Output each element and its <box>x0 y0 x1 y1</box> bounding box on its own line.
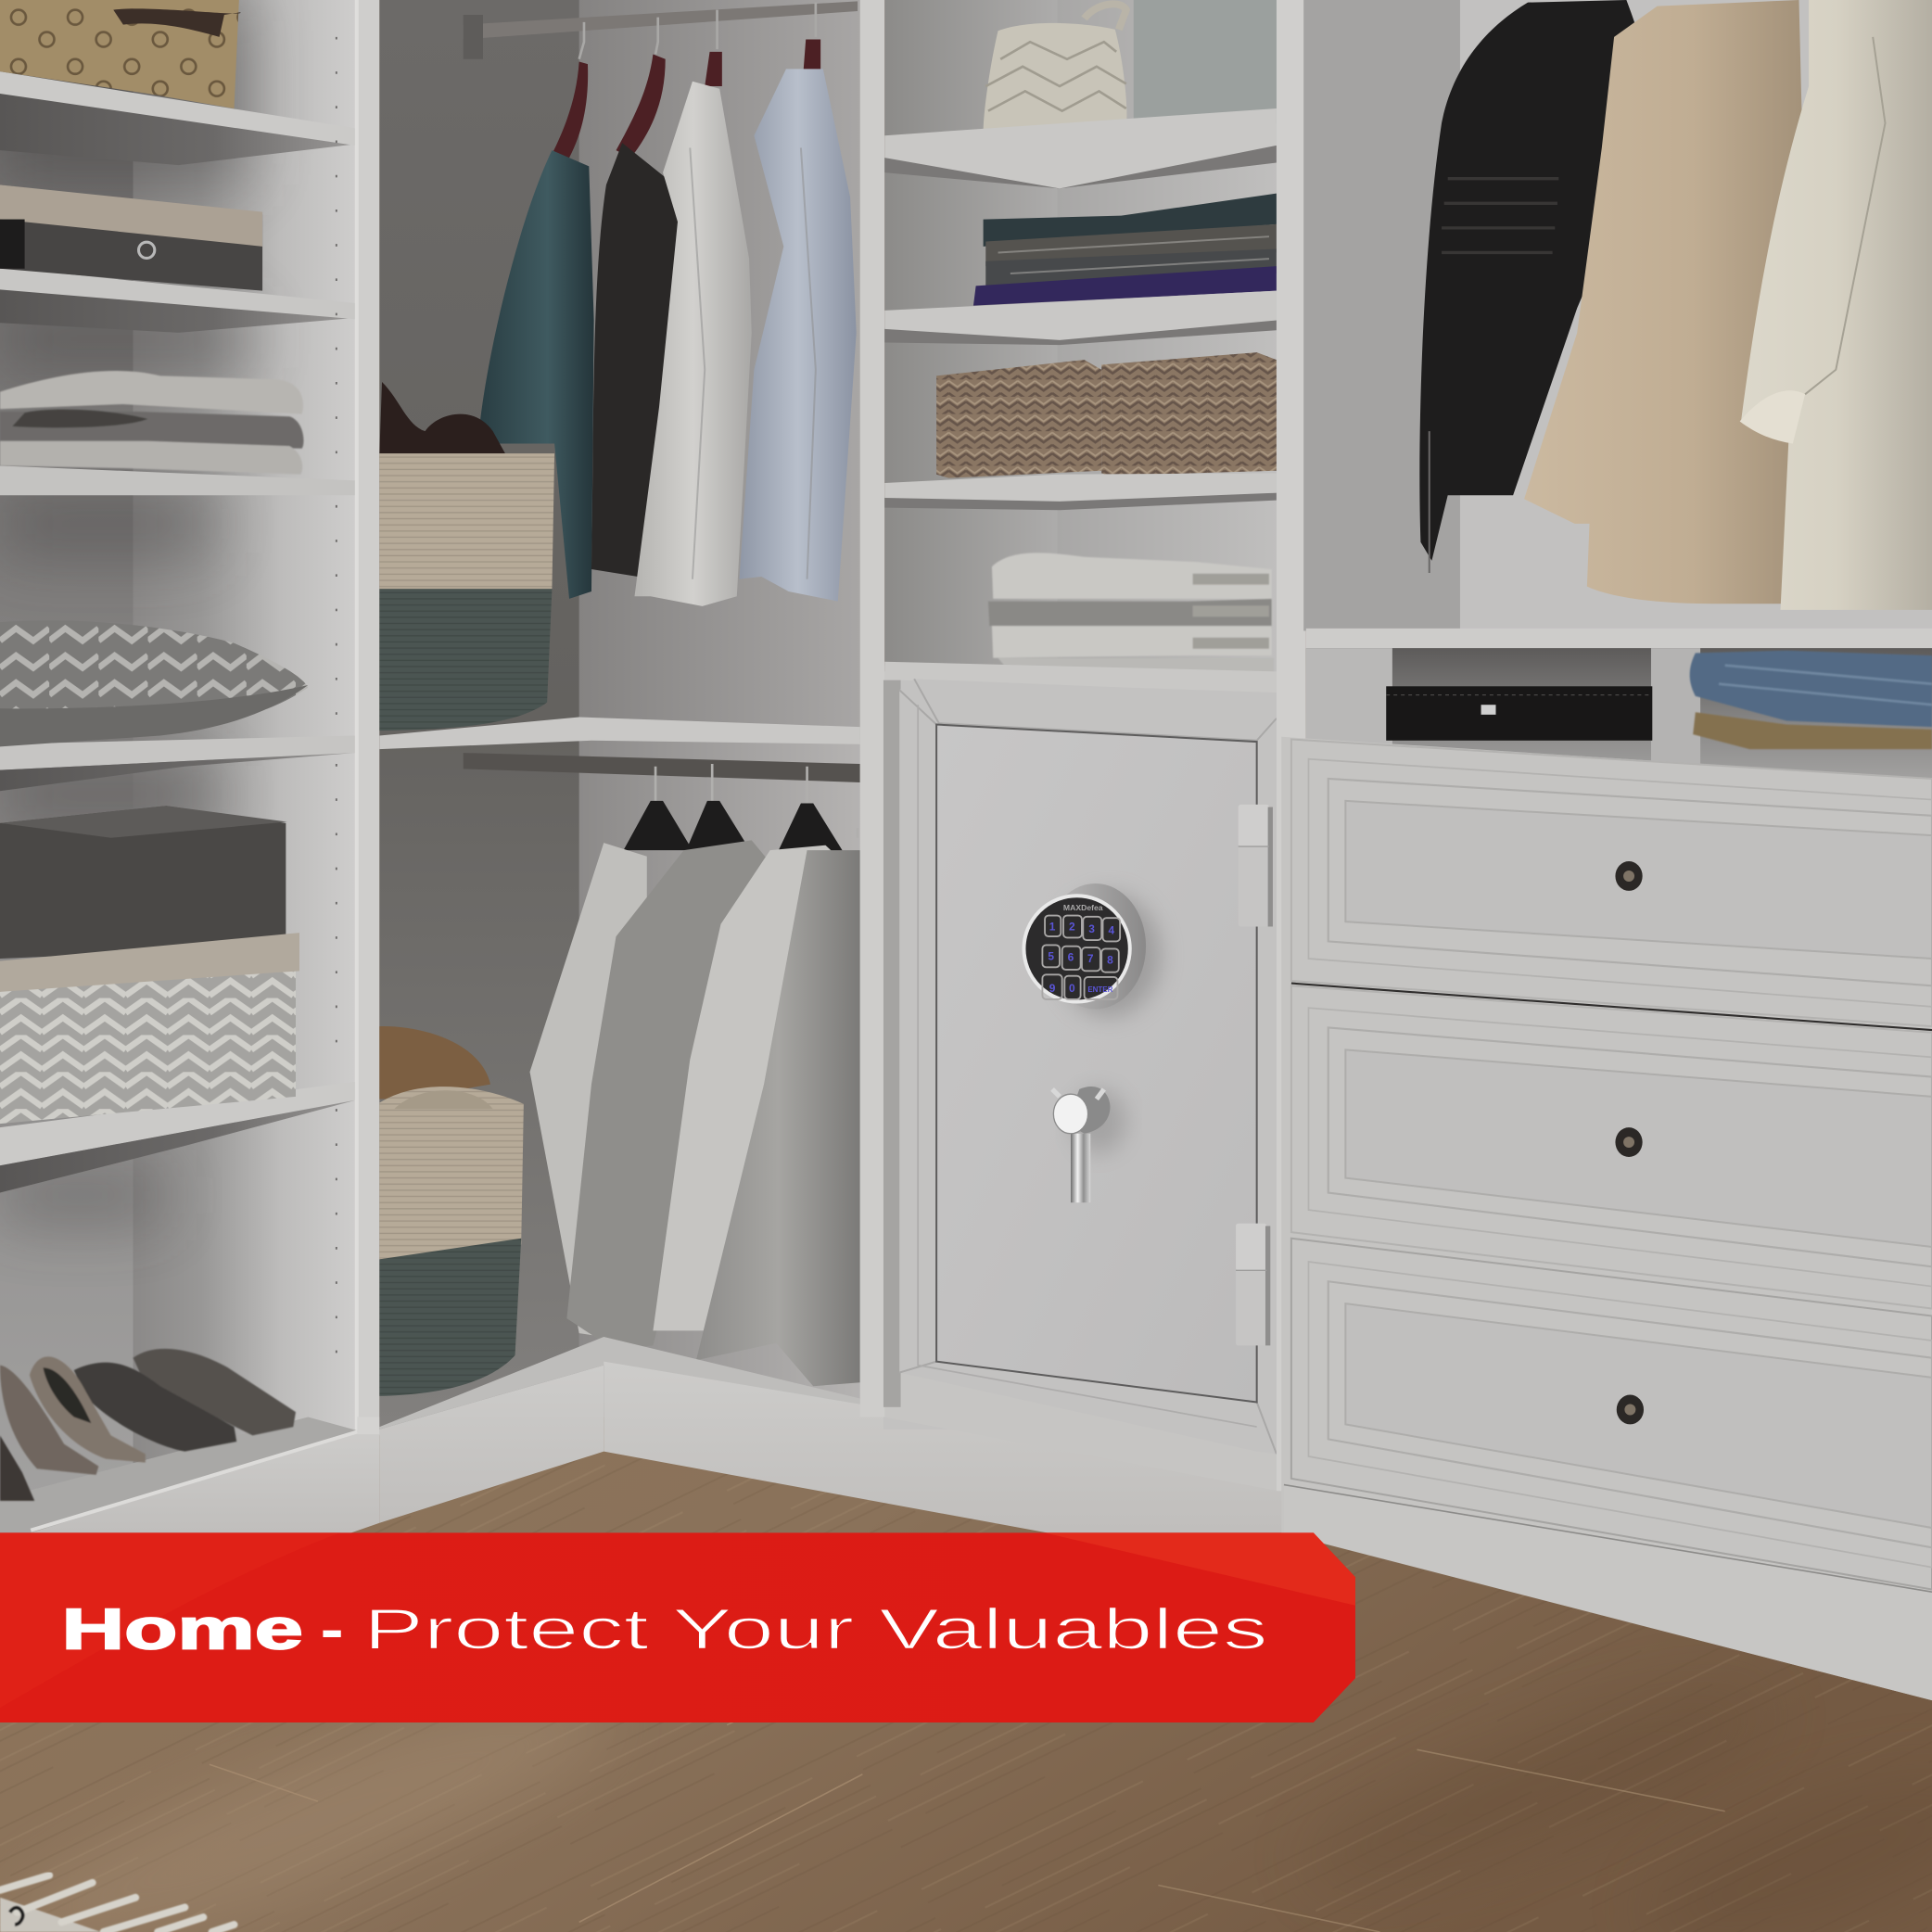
banner subheading: Protect Your Valuables <box>363 1596 1268 1661</box>
stacked boxes <box>0 806 299 1124</box>
knit basket <box>984 4 1126 132</box>
safe <box>883 679 1277 1454</box>
upright <box>1277 0 1306 1491</box>
soft shadows under shelves <box>0 0 247 1220</box>
drawer gap <box>1291 984 1932 1030</box>
right column <box>1277 0 1932 1491</box>
shelf 4 centre <box>884 662 1277 693</box>
key legends <box>1048 920 1115 995</box>
bottom shelf <box>0 1417 357 1532</box>
dial face <box>1023 896 1130 1002</box>
hinge bottom <box>1236 1224 1270 1345</box>
keypad dial shadow <box>1057 894 1161 1016</box>
basket: patterned <box>0 0 240 108</box>
center-left bay <box>379 0 862 1523</box>
shelf 4 underside <box>0 753 355 791</box>
upright <box>355 0 379 1435</box>
hinge top <box>1239 805 1273 926</box>
floor <box>0 1417 1932 1932</box>
shelf 5 <box>0 1082 355 1165</box>
back wall <box>579 0 862 739</box>
wicker baskets <box>936 352 1277 478</box>
upper rod <box>464 1 858 59</box>
lower back wall <box>579 739 862 1417</box>
rug fringe <box>0 1875 235 1932</box>
handle <box>1052 1087 1111 1202</box>
shirt: white <box>634 82 752 606</box>
key legends: 9 <box>1049 982 1056 995</box>
key legends: 5 <box>1048 949 1054 962</box>
shelf 3 centre <box>884 473 1277 502</box>
rail shelf <box>1306 629 1932 649</box>
shoes <box>0 1349 296 1501</box>
key legends: 4 <box>1109 923 1115 936</box>
shelf 4 <box>0 735 355 770</box>
patterned box <box>0 971 296 1124</box>
shelf 5 underside <box>0 1100 355 1193</box>
keypad dial <box>1023 883 1146 1010</box>
left bay <box>0 0 379 1532</box>
drawer 1 <box>1291 739 1932 1026</box>
upright <box>860 0 884 1417</box>
shelf 1 underside <box>0 90 355 165</box>
banner heading: Home <box>61 1596 303 1661</box>
hanging clothes upper <box>478 3 857 606</box>
box: beige lid dark body <box>0 184 262 291</box>
shirt 4 <box>696 850 860 1386</box>
side panel <box>133 0 360 1479</box>
left wall <box>379 0 583 1430</box>
dial housing <box>1045 883 1146 1010</box>
shirt: teal <box>478 150 594 599</box>
jewellery box <box>1386 686 1652 741</box>
shelf pin holes <box>336 37 337 1355</box>
keys <box>1042 916 1120 999</box>
shelf undersides <box>884 146 1277 188</box>
key legends: 6 <box>1068 951 1074 964</box>
bay floor <box>379 1337 860 1430</box>
drawer 3 <box>1291 1239 1932 1590</box>
shelf 2 <box>0 267 355 319</box>
center column <box>860 0 1291 1493</box>
coat: cream <box>1740 0 1932 610</box>
knob 3 <box>1617 1395 1644 1424</box>
shelf 1 centre <box>884 108 1277 188</box>
shelf 3 <box>0 465 355 495</box>
backing behind safe <box>883 666 1281 1430</box>
shirt: black <box>591 143 684 579</box>
safe body <box>899 679 1277 1454</box>
drawer 2 <box>1291 985 1932 1308</box>
shirt 3 <box>653 845 844 1330</box>
lower rod <box>464 753 860 782</box>
key legends: 2 <box>1069 920 1075 933</box>
red banner <box>0 1532 1355 1722</box>
dresser <box>1281 737 1932 1700</box>
folded towels centre <box>988 553 1274 673</box>
ball and basket <box>379 382 554 731</box>
jacket: black <box>1419 0 1651 573</box>
shirt: light blue <box>739 69 857 602</box>
folded towels left <box>0 371 304 475</box>
shelf 2 underside <box>0 287 355 333</box>
plinth: centre <box>604 1362 1291 1532</box>
key legends: 3 <box>1088 922 1095 935</box>
banner dash: - <box>321 1596 344 1661</box>
back corner wall <box>0 0 135 1528</box>
key legends: 7 <box>1087 952 1094 965</box>
shirt 1 <box>530 843 647 1343</box>
coat: beige <box>1524 0 1805 604</box>
key legends: 1 <box>1049 920 1056 933</box>
handle shadow <box>1072 1089 1126 1153</box>
shelf 1 <box>0 71 355 146</box>
left plinth <box>31 1430 379 1532</box>
plinth: dresser <box>1284 1485 1932 1700</box>
key legends: ENTER <box>1087 985 1113 994</box>
key legends: 0 <box>1069 982 1075 995</box>
hanging clothes lower <box>530 764 860 1386</box>
mid shelf <box>379 718 860 749</box>
folded jeans <box>1690 651 1932 749</box>
key legends: 8 <box>1107 953 1113 966</box>
shirt 2 <box>566 840 770 1349</box>
dark box <box>0 806 286 959</box>
knob 1 <box>1615 861 1643 891</box>
shelf 2 centre <box>884 291 1277 340</box>
pillow <box>0 620 308 746</box>
knob 2 <box>1615 1127 1643 1157</box>
keypad logo: MAXDefea <box>1063 903 1103 912</box>
lower basket with cloth <box>379 1026 524 1396</box>
clothes stack <box>973 194 1277 306</box>
door panel <box>936 725 1257 1402</box>
